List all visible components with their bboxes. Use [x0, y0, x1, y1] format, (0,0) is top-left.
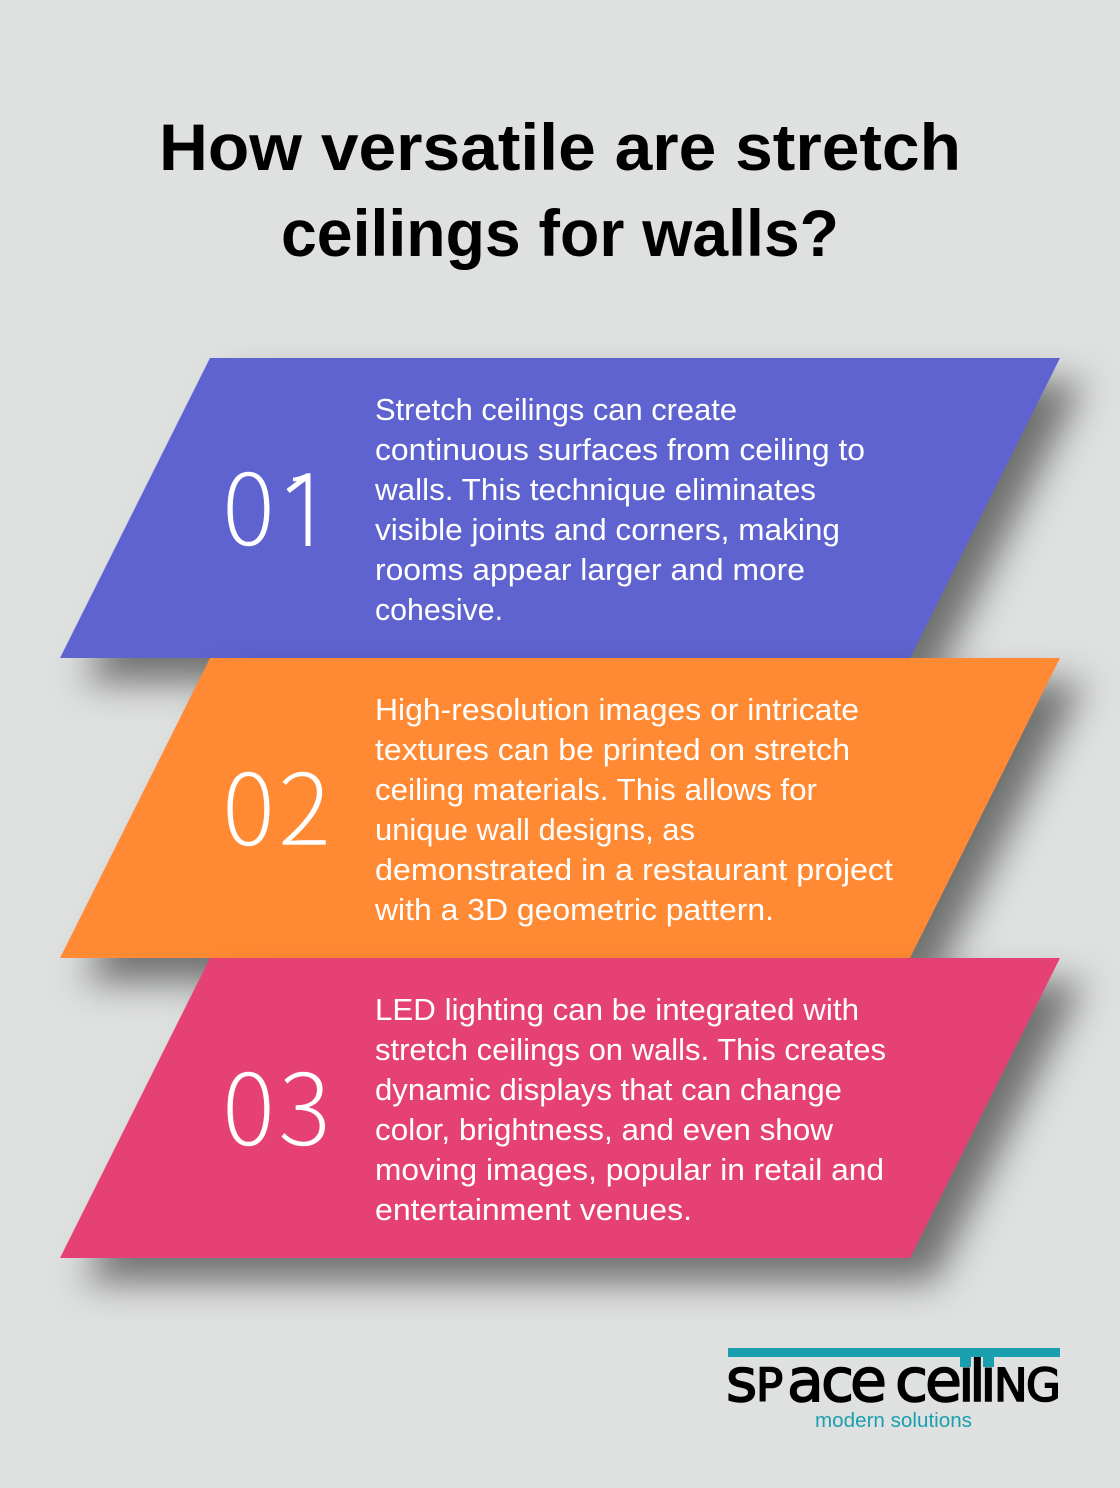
logo wordmark second word: c	[895, 1346, 928, 1416]
text block 03: stretch ceilings on walls. This creates	[375, 1033, 886, 1067]
text block 01: continuous surfaces from ceiling to	[375, 433, 865, 467]
text block 02	[374, 693, 894, 927]
text block 01: walls. This technique eliminates	[374, 473, 816, 507]
text block 03: color, brightness, and even show	[375, 1113, 834, 1147]
logo tagline: modern solutions	[815, 1409, 972, 1432]
text block 03: moving images, popular in retail and	[375, 1153, 884, 1187]
text block 03	[375, 993, 886, 1227]
orange parallelogram	[60, 658, 1060, 958]
logo wordmark second word: G	[1026, 1359, 1061, 1412]
number 03: 3	[278, 1030, 331, 1174]
blue parallelogram	[60, 358, 1060, 658]
logo wordmark first word: s	[726, 1346, 757, 1416]
text block 02: demonstrated in a restaurant project	[375, 853, 894, 887]
panel: step 01	[60, 358, 1060, 658]
panel: step 03	[60, 958, 1060, 1258]
text block 01	[374, 393, 865, 627]
text block 01: rooms appear larger and more	[375, 553, 805, 587]
number 03: 0	[222, 1030, 275, 1174]
number 01: 0	[222, 430, 275, 574]
logo wordmark second word: l	[969, 1346, 986, 1416]
logo wordmark first word: P	[756, 1359, 783, 1412]
pink parallelogram	[60, 958, 1060, 1258]
panel: step 02	[60, 658, 1060, 958]
logo ceiling bar	[728, 1348, 1060, 1367]
text block 02: textures can be printed on stretch	[375, 733, 850, 767]
logo wordmark second word: N	[994, 1359, 1028, 1412]
text block 01: cohesive.	[375, 593, 503, 627]
logo wordmark first word: a	[787, 1346, 824, 1416]
text block 02: unique wall designs, as	[375, 813, 695, 847]
logo wordmark first word: e	[850, 1346, 887, 1416]
number 01	[222, 430, 345, 574]
title: ceilings for walls?	[281, 196, 839, 270]
number 02: 0	[222, 730, 275, 874]
logo wordmark first word: c	[821, 1346, 854, 1416]
text block 03: entertainment venues.	[375, 1193, 692, 1227]
title	[159, 110, 961, 270]
text block 02: with a 3D geometric pattern.	[374, 893, 774, 927]
text block 01: visible joints and corners, making	[375, 513, 840, 547]
logo wordmark second word: i	[958, 1346, 975, 1416]
text block 02: ceiling materials. This allows for	[375, 773, 817, 807]
number 01: 1	[280, 430, 333, 574]
title: How versatile are stretch	[159, 110, 961, 184]
logo wordmark second word: i	[980, 1346, 997, 1416]
logo wordmark second word: e	[925, 1346, 962, 1416]
number 02: 2	[278, 730, 331, 874]
text block 02: High-resolution images or intricate	[375, 693, 859, 727]
text block 01: Stretch ceilings can create	[375, 393, 737, 427]
text block 03: LED lighting can be integrated with	[375, 993, 859, 1027]
logo: Space Ceiling	[726, 1346, 1061, 1432]
text block 03: dynamic displays that can change	[375, 1073, 842, 1107]
